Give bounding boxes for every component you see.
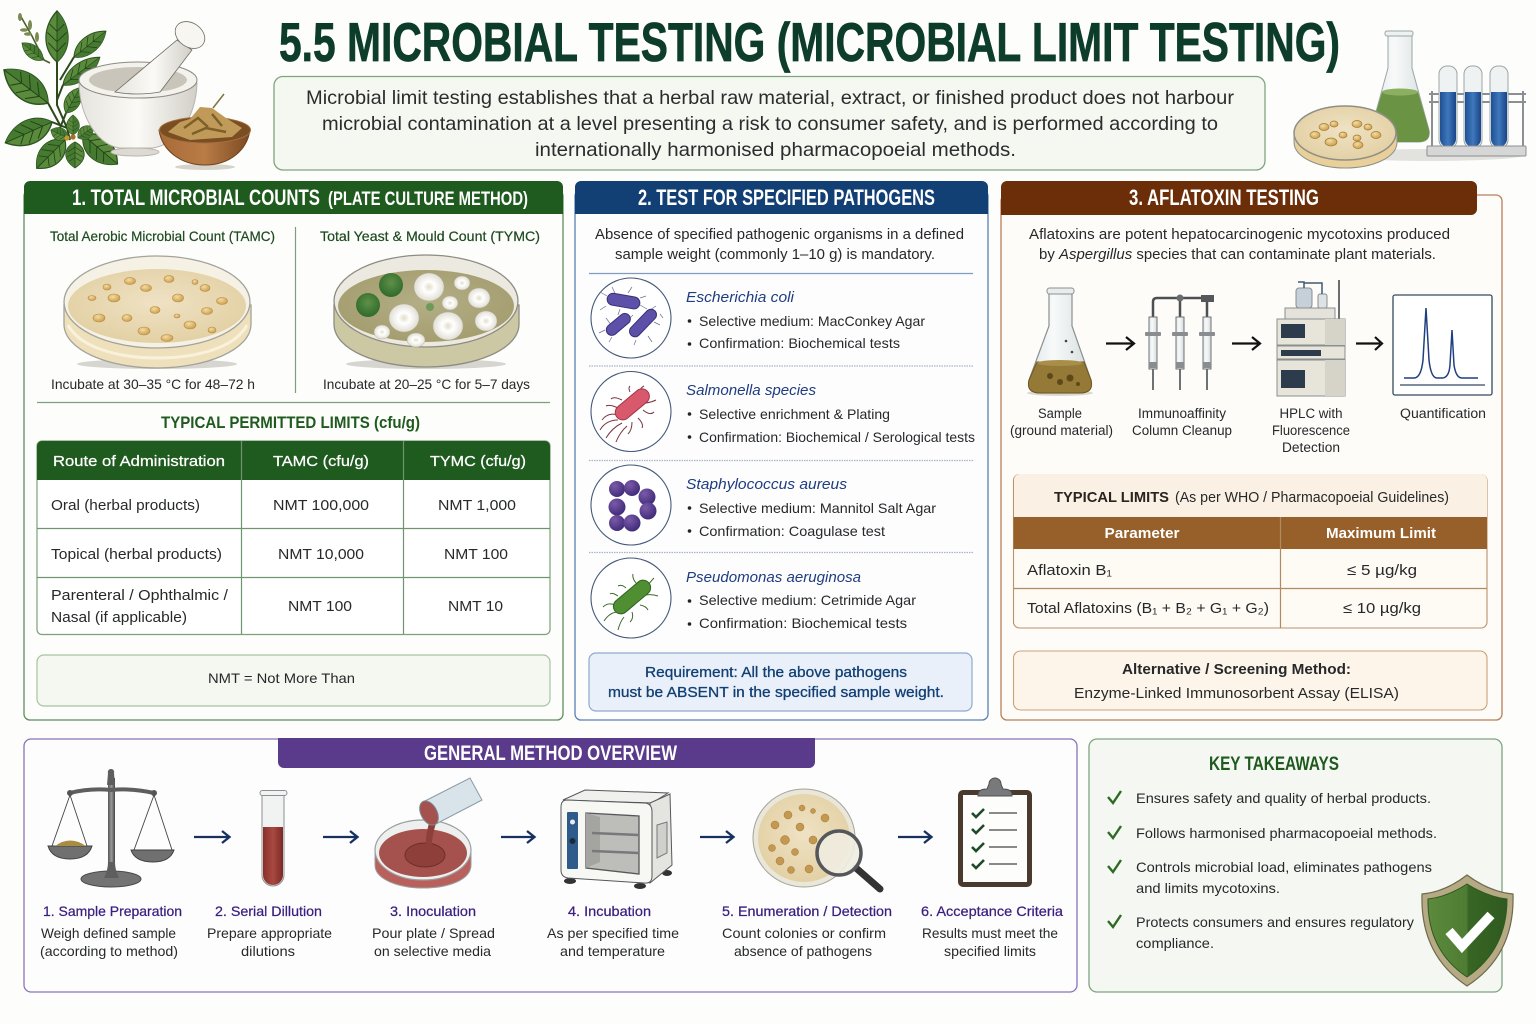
icon: immunoaffinity columns — [1132, 294, 1232, 438]
illustration: herbs, mortar and pestle — [0, 11, 250, 176]
table: aflatoxin limits — [1014, 474, 1487, 628]
table: permitted limits: NMT 1,000 — [438, 497, 516, 514]
method header — [278, 738, 815, 768]
step 6: acceptance criteria: Results must meet the — [922, 925, 1058, 941]
Pseudomonas text — [686, 569, 916, 631]
panel 3 header: 3. AFLATOXIN TESTING — [1129, 185, 1319, 210]
panel 1 header: 1. TOTAL MICROBIAL COUNTS — [72, 185, 320, 210]
method header: GENERAL METHOD OVERVIEW — [424, 742, 677, 765]
panel 2 intro: Absence of specified pathogenic organisms in a defined — [595, 226, 964, 243]
E. coli text — [686, 289, 925, 351]
takeaway items: compliance. — [1136, 935, 1214, 951]
table: aflatoxin limits: Total Aflatoxins (B₁ + B₂ + G₁ + G₂) — [1027, 600, 1269, 617]
step 4: incubation: 4. Incubation — [568, 903, 651, 919]
panel 2 header — [575, 181, 988, 214]
TYMC plate: Incubate at 20–25 °C for 5–7 days — [323, 376, 530, 392]
table: aflatoxin limits: Maximum Limit — [1326, 525, 1436, 542]
step 6: acceptance criteria: specified limits — [944, 943, 1036, 959]
icon: HPLC instrument — [1272, 280, 1350, 455]
step 2: serial dilution: dilutions — [241, 943, 295, 959]
step 5: enumeration and detection — [722, 789, 892, 959]
panel 1: total microbial counts — [24, 181, 563, 720]
Staphylococcus text: Selective medium: Mannitol Salt Agar — [699, 500, 936, 516]
table: permitted limits: NMT 100,000 — [273, 497, 369, 514]
alternative method callout: Alternative / Screening Method: — [1122, 661, 1351, 678]
step 6: acceptance criteria — [921, 778, 1063, 959]
arrow — [194, 831, 230, 843]
table: permitted limits: Parenteral / Ophthalmic / — [51, 587, 229, 604]
table: permitted limits: NMT 100 — [444, 546, 508, 563]
panel 1 header: (PLATE CULTURE METHOD) — [328, 189, 528, 210]
intro text box: Microbial limit testing establishes that a herbal raw material, extract, or finished product does not harbour — [306, 87, 1235, 109]
table: permitted limits: Oral (herbal products) — [51, 497, 200, 514]
table: permitted limits — [37, 441, 550, 634]
icon: sample flask — [1010, 288, 1113, 438]
icon: sample flask: Sample — [1038, 406, 1082, 421]
TAMC plate: Incubate at 30–35 °C for 48–72 h — [51, 376, 255, 392]
requirement callout — [589, 653, 972, 711]
pathogen: Staphylococcus — [591, 465, 936, 545]
takeaway items: and limits mycotoxins. — [1136, 880, 1280, 896]
panel 2: specified pathogens — [575, 181, 988, 720]
step 5: enumeration and detection: Count colonies or confirm — [722, 925, 886, 941]
E. coli text: Confirmation: Biochemical tests — [699, 335, 900, 351]
panel 2 intro: sample weight (commonly 1–10 g) is mandatory. — [615, 246, 935, 263]
table: aflatoxin limits: Parameter — [1104, 525, 1180, 542]
arrow — [898, 831, 932, 843]
Staphylococcus text: Confirmation: Coagulase test — [699, 523, 885, 539]
takeaways heading: KEY TAKEAWAYS — [1209, 754, 1339, 775]
panel 3 header — [1001, 181, 1477, 215]
step 1: sample preparation: (according to method) — [40, 943, 178, 959]
step 1: sample preparation: Weigh defined sample — [41, 925, 176, 941]
TYMC plate — [320, 228, 540, 392]
mortar — [111, 148, 159, 156]
alternative method callout: Enzyme-Linked Immunosorbent Assay (ELISA) — [1074, 685, 1399, 702]
panel 2 header: 2. TEST FOR SPECIFIED PATHOGENS — [638, 185, 935, 210]
TAMC plate: Total Aerobic Microbial Count (TAMC) — [50, 228, 275, 244]
table: permitted limits: TYMC (cfu/g) — [430, 453, 526, 470]
Staphylococcus text: Staphylococcus aureus — [686, 476, 848, 493]
table: permitted limits: NMT 100 — [288, 598, 352, 615]
step 2: serial dilution: Prepare appropriate — [207, 925, 332, 941]
arrow — [1232, 337, 1260, 350]
arrow — [1106, 337, 1134, 350]
Pseudomonas text: Pseudomonas aeruginosa — [686, 569, 861, 586]
takeaway items — [1108, 790, 1437, 951]
panel 2 intro — [595, 226, 964, 263]
step 4: incubation — [547, 790, 679, 959]
subheading: typical permitted limits: TYPICAL PERMITTED LIMITS (cfu/g) — [161, 413, 420, 432]
step 4: incubation: and temperature — [560, 943, 665, 959]
pathogen: Salmonella — [591, 372, 975, 452]
icon: immunoaffinity columns: Column Cleanup — [1132, 423, 1232, 438]
table: aflatoxin limits: ≤ 10 µg/kg — [1343, 600, 1421, 617]
requirement callout: Requirement: All the above pathogens — [645, 664, 907, 681]
Salmonella text — [686, 382, 975, 445]
panel 3 intro: by Aspergillus species that can contaminate plant materials. — [1039, 246, 1436, 263]
pathogen: E. coli — [591, 278, 925, 358]
panel 3 intro: Aflatoxins are potent hepatocarcinogenic mycotoxins produced — [1029, 226, 1450, 243]
icon: chromatogram — [1393, 295, 1492, 421]
arrow — [323, 831, 358, 843]
table: permitted limits: Nasal (if applicable) — [51, 609, 187, 626]
pathogen: Pseudomonas — [591, 558, 916, 638]
requirement callout: must be ABSENT in the specified sample weight. — [608, 684, 944, 701]
panel 1 header — [24, 181, 563, 214]
arrow — [700, 831, 734, 843]
note: NMT definition: NMT = Not More Than — [208, 670, 355, 686]
Pseudomonas text: Selective medium: Cetrimide Agar — [699, 592, 916, 608]
step 3: inoculation: on selective media — [374, 943, 491, 959]
takeaway items: Protects consumers and ensures regulatory — [1136, 914, 1414, 930]
alternative method callout — [1014, 651, 1487, 710]
Salmonella text: Salmonella species — [686, 382, 816, 399]
takeaway items: Ensures safety and quality of herbal products. — [1136, 790, 1431, 806]
table: aflatoxin limits: TYPICAL LIMITS — [1054, 489, 1169, 506]
table: permitted limits: NMT 10 — [448, 598, 503, 615]
Staphylococcus text — [686, 476, 936, 539]
intro text box: microbial contamination at a level presenting a risk to consumer safety, and is performed according to — [322, 113, 1218, 135]
step 2: serial dilution — [207, 790, 332, 959]
panel: general method overview — [24, 738, 1077, 992]
Salmonella text: Selective enrichment & Plating — [699, 406, 890, 422]
intro text box — [274, 76, 1265, 170]
E. coli text: Escherichia coli — [686, 289, 795, 306]
step 5: enumeration and detection: 5. Enumeration / Detection — [722, 903, 892, 919]
table: permitted limits: Route of Administration — [53, 453, 225, 470]
panel 3 intro — [1029, 226, 1450, 263]
step 1: sample preparation — [40, 769, 182, 959]
step 6: acceptance criteria: 6. Acceptance Criteria — [921, 903, 1063, 919]
arrow — [501, 831, 534, 843]
step 3: inoculation: Pour plate / Spread — [372, 925, 495, 941]
panel 3: aflatoxin testing — [1001, 181, 1502, 720]
icon: immunoaffinity columns: Immunoaffinity — [1138, 406, 1226, 421]
icon: sample flask: (ground material) — [1010, 423, 1113, 438]
step 1: sample preparation: 1. Sample Preparation — [43, 903, 182, 919]
icon: HPLC instrument: Detection — [1282, 440, 1340, 455]
step 3: inoculation: 3. Inoculation — [390, 903, 476, 919]
takeaway items: Follows harmonised pharmacopoeial methods. — [1136, 825, 1437, 841]
table: aflatoxin limits: ≤ 5 µg/kg — [1347, 562, 1417, 579]
icon: chromatogram: Quantification — [1400, 406, 1486, 421]
step 5: enumeration and detection: absence of pathogens — [734, 943, 872, 959]
E. coli text: Selective medium: MacConkey Agar — [699, 313, 925, 329]
step 3: inoculation — [372, 778, 495, 959]
TAMC plate — [50, 228, 275, 392]
icon: HPLC instrument: HPLC with — [1280, 406, 1342, 421]
table: permitted limits: Topical (herbal products) — [51, 546, 222, 563]
panel: key takeaways — [1089, 739, 1513, 992]
table: permitted limits: NMT 10,000 — [278, 546, 364, 563]
table: permitted limits: TAMC (cfu/g) — [273, 453, 369, 470]
intro text box: internationally harmonised pharmacopoeial methods. — [535, 139, 1016, 161]
wooden bowl — [175, 164, 235, 170]
arrow — [1356, 337, 1382, 350]
illustration: flask, petri dish and test tubes — [1294, 31, 1526, 168]
divider — [294, 227, 296, 393]
takeaway items: Controls microbial load, eliminates pathogens — [1136, 859, 1432, 875]
table: aflatoxin limits: Aflatoxin B₁ — [1027, 562, 1112, 579]
Pseudomonas text: Confirmation: Biochemical tests — [699, 615, 907, 631]
step 4: incubation: As per specified time — [547, 925, 679, 941]
step 2: serial dilution: 2. Serial Dillution — [215, 903, 322, 919]
icon: HPLC instrument: Fluorescence — [1272, 423, 1350, 438]
TYMC plate: Total Yeast & Mould Count (TYMC) — [320, 228, 540, 244]
note: NMT definition — [37, 655, 550, 706]
Salmonella text: Confirmation: Biochemical / Serological tests — [699, 429, 975, 445]
icon: shield with check — [1422, 875, 1513, 986]
table: aflatoxin limits: (As per WHO / Pharmacopoeial Guidelines) — [1175, 490, 1449, 506]
